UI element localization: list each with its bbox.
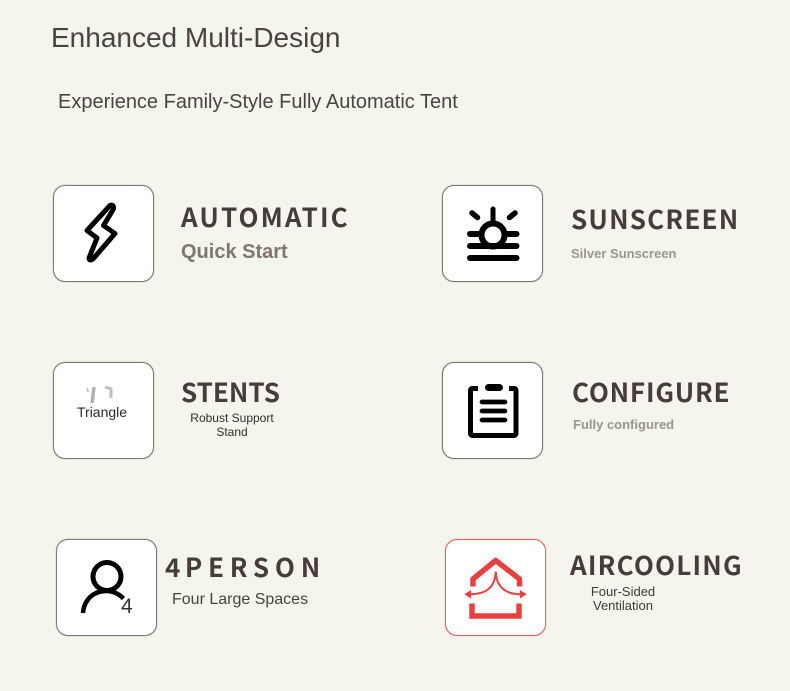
subtitle: Experience Family-Style Fully Automatic Tent [58,91,458,113]
caption: robust support stand: Stand [216,425,248,439]
heading: 4 person: 4PERSON [165,548,326,585]
icon: sun over horizon [442,185,543,282]
icon: person: 4 [121,595,133,618]
title: Enhanced Multi-Design [51,22,340,53]
panel: aircooling [444,538,743,636]
caption: four large spaces: Four Large Spaces [172,591,308,608]
icon: tent ventilation [445,539,546,636]
caption: silver sunscreen: Silver Sunscreen [571,246,676,261]
caption: four-sided ventilation: Four-Sided [591,584,655,599]
panel: configure [442,362,730,460]
heading: stents: STENTS [181,373,280,410]
caption: robust support stand [190,411,274,439]
heading: configure: CONFIGURE [572,373,730,410]
heading: sunscreen: SUNSCREEN [571,200,739,237]
icon: person [56,539,157,636]
icon: clipboard [442,362,543,459]
caption: fully configured: Fully configured [573,417,674,432]
panel: stents [52,362,280,460]
heading: aircooling: AIRCOOLING [570,546,743,583]
icon: triangle [53,362,154,459]
icon: lightning bolt [53,185,154,282]
caption: robust support stand: Robust Support [190,411,274,425]
caption: four-sided ventilation [591,584,655,613]
icon: triangle: Triangle [77,404,127,420]
caption: quick start: Quick Start [181,241,288,263]
panel: 4 person [56,538,326,636]
panel: automatic [52,184,350,282]
panel: sunscreen [442,184,739,282]
caption: four-sided ventilation: Ventilation [593,598,653,613]
heading: automatic: AUTOMATIC [181,198,350,235]
